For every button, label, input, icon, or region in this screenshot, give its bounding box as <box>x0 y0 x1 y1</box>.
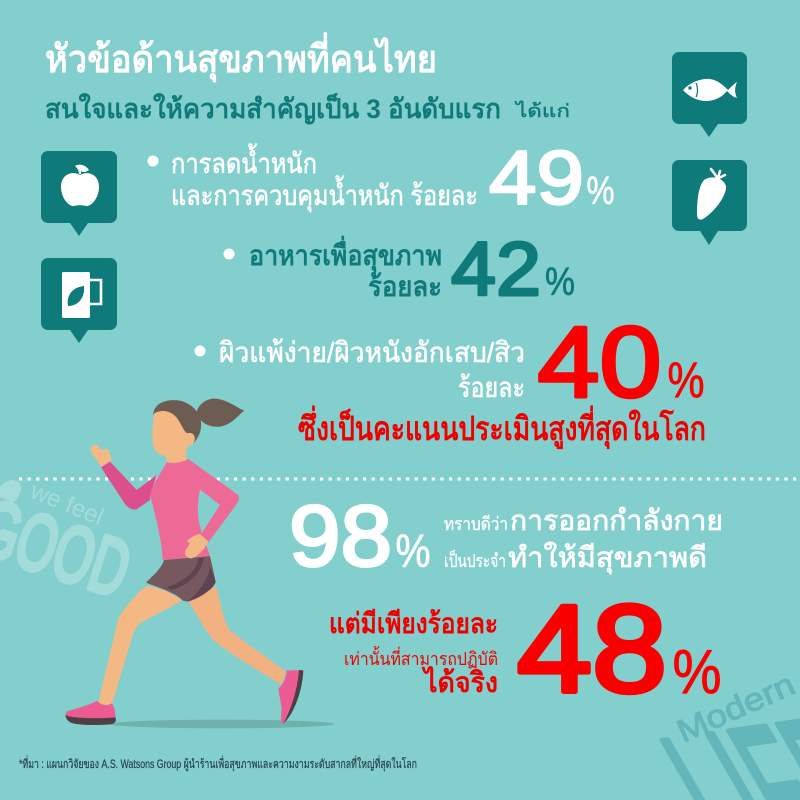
decorative lettering: we feel good: we feel <box>26 477 107 531</box>
stat 98 percent: 98 <box>289 488 392 584</box>
stat 49 percent: การลดน้ำหนัก <box>171 143 317 179</box>
stat 42 percent <box>224 227 575 312</box>
red callout: highest in the world: ซึ่งเป็นคะแนนประเมินสูงที่สุดในโลก <box>298 405 706 450</box>
source footnote: *ที่มา : แผนกวิจัยของ A.S. Watsons Group ผู้นำร้านเพื่อสุขภาพและความงามระดับสากลที่ใหญ่ที่สุดในโลก <box>19 755 417 772</box>
stat 49 percent: และการควบคุมน้ำหนัก ร้อยละ <box>171 175 478 213</box>
stat 40 percent <box>194 306 704 418</box>
text: knows exercise is healthy: ทำให้มีสุขภาพดี <box>508 541 707 575</box>
stat 42 percent: ร้อยละ <box>368 271 442 302</box>
stat 40 percent: % <box>668 352 704 408</box>
text: knows exercise is healthy: เป็นประจำ <box>444 549 506 571</box>
text: but only percent: แต่มีเพียงร้อยละ <box>329 608 498 639</box>
stat 40 percent: ร้อยละ <box>458 372 525 403</box>
icon: carrot <box>672 160 747 245</box>
stat 42 percent: อาหารเพื่อสุขภาพ <box>249 235 442 273</box>
icon: herbal tea mug <box>41 258 117 343</box>
decorative lettering: modern life: Modern <box>671 666 800 749</box>
stat 40 percent: 40 <box>538 306 662 418</box>
stat 42 percent: 42 <box>451 227 541 312</box>
stat 48 percent: 48 <box>517 580 667 718</box>
icon: fish <box>672 52 747 137</box>
stat 49 percent: % <box>586 170 614 213</box>
stat 48 percent <box>517 580 722 718</box>
stat 42 percent: % <box>545 261 575 304</box>
illustration: woman running <box>65 399 334 728</box>
text: knows exercise is healthy: ทราบดีว่า <box>444 514 508 534</box>
stat 98 percent <box>289 488 430 584</box>
stat 48 percent: % <box>672 638 722 707</box>
icon: apple <box>41 151 117 236</box>
text: but only percent: เท่านั้นที่สามารถปฏิบัติ <box>344 646 498 669</box>
stat 49 percent <box>148 136 614 221</box>
subtitle: สนใจและให้ความสำคัญเป็น 3 อันดับแรก <box>45 91 501 125</box>
stat 40 percent: ผิวแพ้ง่าย/ผิวหนังอักเสบ/สิว <box>219 337 525 368</box>
stat 98 percent: % <box>396 524 430 576</box>
text: but only percent <box>329 608 498 698</box>
stat 49 percent: 49 <box>489 136 584 221</box>
text: but only percent: ได้จริง <box>421 666 498 698</box>
title: หัวข้อด้านสุขภาพที่คนไทย <box>45 32 437 83</box>
subtitle: ได้แก่ <box>514 100 570 121</box>
text: knows exercise is healthy <box>444 505 723 575</box>
text: knows exercise is healthy: การออกกำลังกาย <box>510 505 723 536</box>
